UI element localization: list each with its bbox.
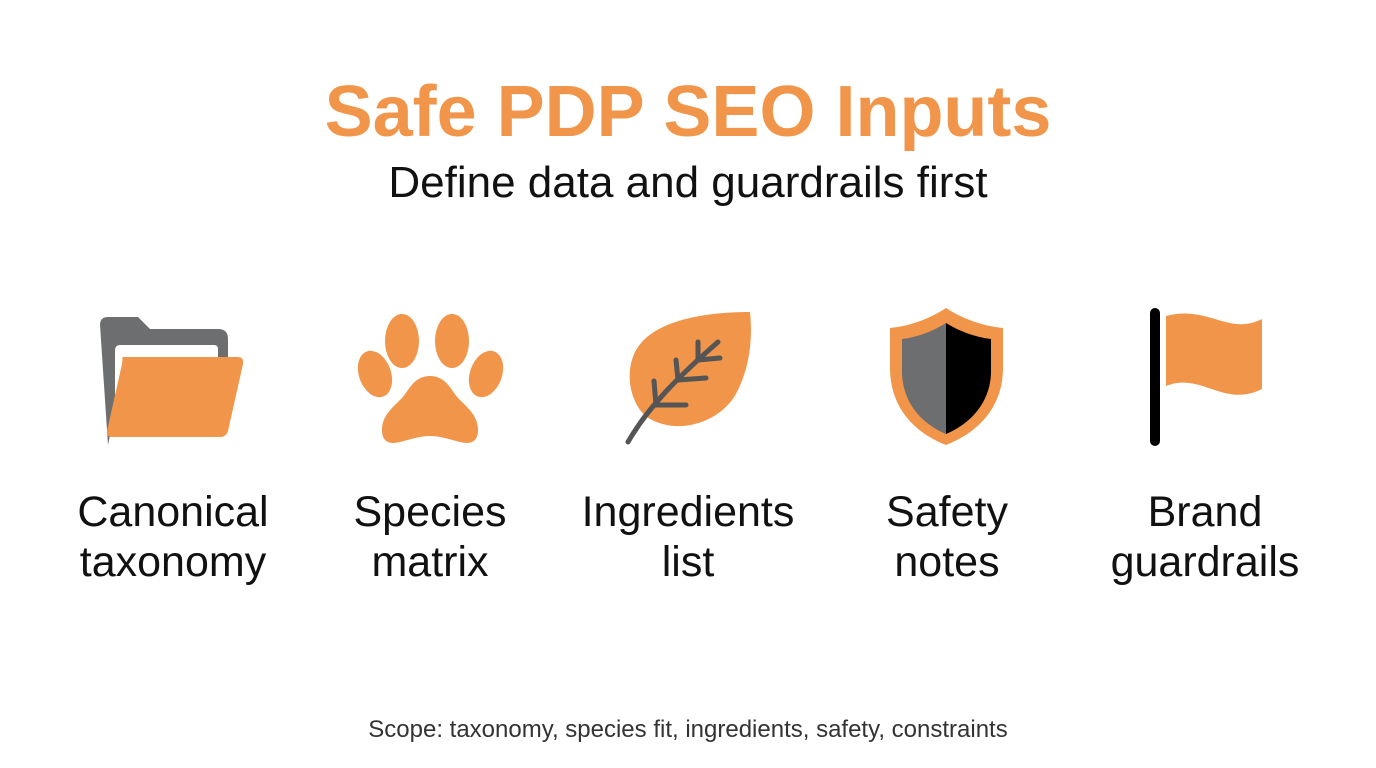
icon: flag xyxy=(1150,308,1262,446)
label: brand guardrails: guardrails xyxy=(1111,538,1299,586)
subtitle: Define data and guardrails first xyxy=(388,158,988,207)
title: Safe PDP SEO Inputs xyxy=(325,72,1051,152)
label: species matrix xyxy=(354,488,506,586)
label: canonical taxonomy: taxonomy xyxy=(80,538,266,586)
footer: Scope: taxonomy, species fit, ingredients, safety, constraints xyxy=(368,716,1008,743)
label: safety notes: Safety xyxy=(886,488,1008,536)
icon: leaf xyxy=(628,312,751,442)
icon: shield xyxy=(890,308,1003,445)
label: ingredients list: Ingredients xyxy=(582,488,794,536)
label: brand guardrails xyxy=(1111,488,1299,586)
label: brand guardrails: Brand xyxy=(1148,488,1262,536)
icon: paw xyxy=(352,314,509,443)
label: ingredients list: list xyxy=(662,538,714,586)
label: ingredients list xyxy=(582,488,794,586)
label: canonical taxonomy: Canonical xyxy=(77,488,269,536)
label: canonical taxonomy xyxy=(77,488,269,586)
label: safety notes: notes xyxy=(894,538,1000,586)
label: species matrix: Species xyxy=(354,488,506,536)
label: species matrix: matrix xyxy=(371,538,489,586)
label: safety notes xyxy=(886,488,1008,586)
icon: folder xyxy=(100,317,243,445)
